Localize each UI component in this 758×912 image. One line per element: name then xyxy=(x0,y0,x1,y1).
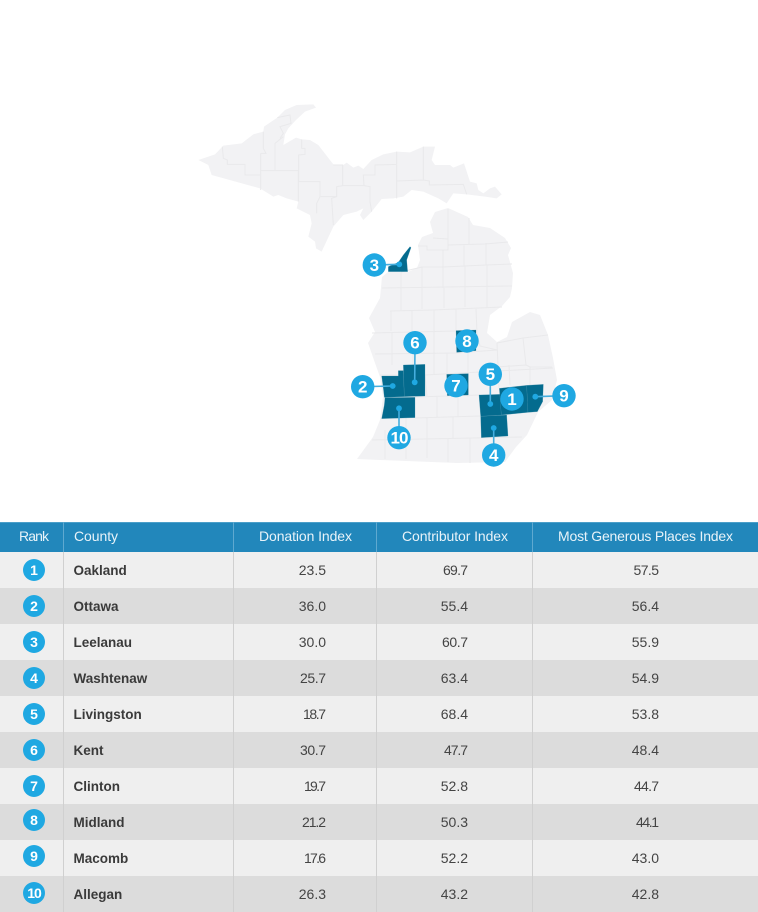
row backgrounds xyxy=(0,552,758,912)
map: Michigan counties xyxy=(198,104,576,467)
row 6: 48.4 xyxy=(632,742,659,758)
map marker 5: 5 xyxy=(486,365,495,384)
counties: Ottawa, Kent, Allegan, Clinton xyxy=(382,364,468,419)
map marker 9: 9 xyxy=(559,387,569,406)
row 10: 42.8 xyxy=(632,886,659,902)
map marker 6 xyxy=(403,331,427,354)
row 2: 36.0 xyxy=(299,598,326,614)
county: Midland xyxy=(456,330,476,352)
row 5 xyxy=(23,703,659,725)
row 6 xyxy=(23,739,659,761)
map marker 3: 3 xyxy=(370,256,379,275)
map marker 7 xyxy=(444,374,468,397)
row 7: 19.7 xyxy=(304,778,326,794)
row 3: 55.9 xyxy=(632,634,659,650)
map marker 7: 7 xyxy=(451,377,461,396)
row 1 xyxy=(23,559,659,581)
row 2: Ottawa xyxy=(74,599,119,614)
row 1: 57.5 xyxy=(634,562,659,578)
row 4 xyxy=(23,667,659,689)
row 6: 47.7 xyxy=(444,742,468,758)
row 4: Washtenaw xyxy=(74,671,148,686)
row 10: 26.3 xyxy=(299,886,326,902)
row 5: 18.7 xyxy=(303,706,326,722)
table header: Contributor Index xyxy=(402,528,508,544)
row 5: 53.8 xyxy=(632,706,659,722)
map marker 1: 1 xyxy=(507,390,517,409)
row 5: Livingston xyxy=(74,707,142,722)
row 2: 56.4 xyxy=(632,598,659,614)
map marker 5 xyxy=(479,363,502,386)
row 2 xyxy=(23,595,659,617)
map marker 8 xyxy=(455,329,479,353)
counties: Livingston, Oakland, Macomb, Washtenaw xyxy=(479,384,543,438)
map marker 10 xyxy=(387,426,411,449)
row 8 xyxy=(23,809,659,831)
map marker 1 xyxy=(500,387,524,411)
row 10: 43.2 xyxy=(441,886,468,902)
row 5: 68.4 xyxy=(441,706,468,722)
row 9 xyxy=(23,845,659,867)
row 9: 9 xyxy=(30,848,38,864)
map marker 4: 4 xyxy=(489,446,499,465)
map marker 6: 6 xyxy=(410,334,420,353)
table header: County xyxy=(74,528,118,544)
row 4: 4 xyxy=(30,670,38,686)
row 4: 25.7 xyxy=(300,670,326,686)
row 8: Midland xyxy=(74,815,124,830)
table header xyxy=(0,522,758,552)
leader dots xyxy=(390,261,538,431)
row 10 xyxy=(23,882,659,904)
row 7: 7 xyxy=(30,778,38,794)
row 8: 50.3 xyxy=(441,814,468,830)
row 3: 3 xyxy=(30,634,38,650)
row 7: Clinton xyxy=(74,779,120,794)
row 6: Kent xyxy=(74,743,104,758)
row 2: 2 xyxy=(30,598,38,614)
row 1: 69.7 xyxy=(443,562,468,578)
county: Leelanau xyxy=(388,247,411,272)
table header: Most Generous Places Index xyxy=(558,528,733,544)
table xyxy=(0,522,758,912)
row 7: 44.7 xyxy=(634,778,659,794)
row 7: 52.8 xyxy=(441,778,468,794)
row 2: 55.4 xyxy=(441,598,468,614)
row 3: 30.0 xyxy=(299,634,326,650)
row 3: 60.7 xyxy=(442,634,468,650)
table header: Rank xyxy=(19,528,50,544)
map marker 3 xyxy=(363,253,386,277)
row 1: 1 xyxy=(30,562,38,578)
row 10: 10 xyxy=(27,885,42,901)
row 9: Macomb xyxy=(74,851,128,866)
county boundaries xyxy=(372,209,553,463)
row 9: 17.6 xyxy=(304,850,326,866)
row 4: 54.9 xyxy=(632,670,659,686)
row 10: Allegan xyxy=(74,887,122,902)
row 4: 63.4 xyxy=(441,670,468,686)
map marker 8: 8 xyxy=(462,332,472,351)
map marker 9 xyxy=(552,384,576,407)
row 9: 43.0 xyxy=(632,850,659,866)
leader lines xyxy=(363,264,564,455)
row 6: 6 xyxy=(30,742,38,758)
map marker 10: 10 xyxy=(391,429,408,448)
row 9: 52.2 xyxy=(441,850,468,866)
map marker 4 xyxy=(482,443,505,467)
map marker 2 xyxy=(351,375,374,398)
row 8: 44.1 xyxy=(636,814,659,830)
lower peninsula xyxy=(357,208,557,463)
row 3: Leelanau xyxy=(74,635,132,650)
row 7 xyxy=(23,775,659,797)
row 8: 21.2 xyxy=(302,814,326,830)
row 3 xyxy=(23,631,659,653)
row 1: 23.5 xyxy=(299,562,326,578)
row 5: 5 xyxy=(30,706,38,722)
upper peninsula xyxy=(198,104,502,252)
table header: Donation Index xyxy=(259,528,352,544)
map marker 2: 2 xyxy=(358,378,367,397)
row 1: Oakland xyxy=(74,563,127,578)
row 6: 30.7 xyxy=(300,742,326,758)
row 8: 8 xyxy=(30,812,38,828)
